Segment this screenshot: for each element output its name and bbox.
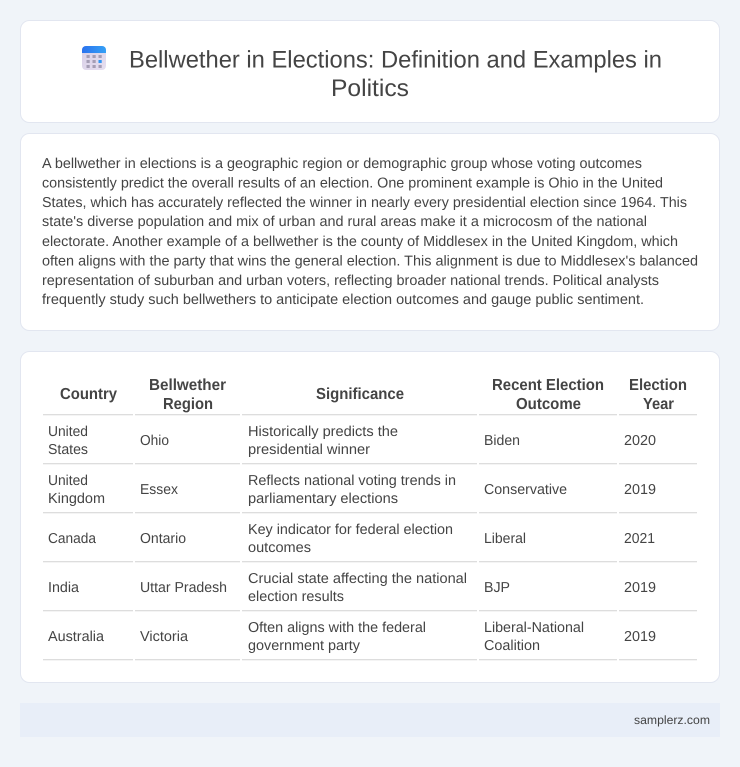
table row: Canada: Canada	[48, 531, 96, 547]
table row: Australia	[48, 620, 656, 654]
table row: United Kingdom: Kingdom	[48, 491, 105, 507]
table row: India: BJP	[484, 580, 510, 596]
table row: United Kingdom: Reflects national voting trends in	[248, 473, 456, 489]
text block: description paragraph: consistently predict the overall results of an election. One prominent example is Ohio in the United	[42, 176, 663, 192]
text block: description paragraph: state's diverse population and mix of urban and rural areas make it a microcosm of the national	[42, 214, 647, 230]
table row: Australia: government party	[248, 638, 361, 654]
table row: United States: United	[48, 424, 88, 440]
table row: United States: Biden	[484, 433, 520, 449]
table row: United States: 2020	[624, 433, 656, 449]
table row: Canada	[48, 522, 655, 556]
text block: description paragraph: often aligns with the party that wins the general election. This alignment is due to Middlesex's balanced	[42, 254, 698, 270]
table row: Canada: outcomes	[248, 540, 311, 556]
table header: Significance	[316, 386, 404, 403]
table row: United States: presidential winner	[248, 442, 370, 458]
panel: description	[20, 134, 720, 330]
table row: United Kingdom: 2019	[624, 482, 656, 498]
table header: Year	[643, 396, 674, 413]
table row: India	[48, 571, 656, 605]
table row: India: 2019	[624, 580, 656, 596]
table row: India: election results	[248, 589, 344, 605]
table row: Canada: Ontario	[140, 531, 186, 547]
table row: Australia: Coalition	[484, 638, 540, 654]
table row: United Kingdom: Conservative	[484, 482, 567, 498]
table row: India: Crucial state affecting the national	[248, 571, 467, 587]
footer	[20, 703, 720, 737]
text block: description paragraph: A bellwether in elections is a geographic region or demographic group whose voting outcomes	[42, 156, 642, 172]
table row: India: Uttar Pradesh	[140, 580, 227, 596]
text block: description paragraph	[42, 156, 698, 308]
panel: table	[20, 352, 720, 682]
table header: Bellwether	[149, 377, 226, 394]
table header: Region	[163, 396, 213, 413]
table row: United States: Ohio	[140, 433, 169, 449]
table header: Recent Election	[492, 377, 604, 394]
icon: calendar	[82, 46, 106, 70]
table header: Country	[60, 386, 117, 403]
title	[129, 46, 662, 102]
table row: United Kingdom	[48, 473, 656, 507]
table row: United Kingdom: Essex	[140, 482, 179, 498]
table header	[60, 377, 687, 413]
table row: Canada: Liberal	[484, 531, 526, 547]
table header: Election	[629, 377, 687, 394]
table row: United Kingdom: parliamentary elections	[248, 491, 398, 507]
text block: description paragraph: representation of suburban and urban voters, reflecting broader national trends. Political analysts	[42, 273, 659, 289]
table row: Australia: Liberal-National	[484, 620, 584, 636]
table row: Canada: Key indicator for federal election	[248, 522, 453, 538]
table row: India: India	[48, 580, 79, 596]
title: Politics	[331, 75, 409, 102]
text block: description paragraph: electorate. Another example of a bellwether is the county of Middlesex in the United Kingdom, which	[42, 234, 678, 250]
table row: Australia: Victoria	[140, 629, 188, 645]
text block: description paragraph: States, which has accurately reflected the winner in nearly every presidential election since 1964. This	[42, 195, 687, 211]
table row: Australia: 2019	[624, 629, 656, 645]
panel: title card	[20, 20, 720, 122]
title: Bellwether in Elections: Definition and Examples in	[129, 46, 662, 74]
text block: description paragraph: frequently study such bellwethers to anticipate election outcomes and gauge public sentiment.	[42, 292, 644, 308]
table header: Outcome	[516, 396, 581, 413]
table row: United Kingdom: United	[48, 473, 88, 489]
table row: Australia: Often aligns with the federal	[248, 620, 426, 636]
footer: samplerz.com	[634, 713, 710, 727]
table row: United States: States	[48, 442, 88, 458]
table row: United States	[48, 424, 656, 458]
table row: Australia: Australia	[48, 629, 104, 645]
table row: Canada: 2021	[624, 531, 655, 547]
table row: United States: Historically predicts the	[248, 424, 398, 440]
